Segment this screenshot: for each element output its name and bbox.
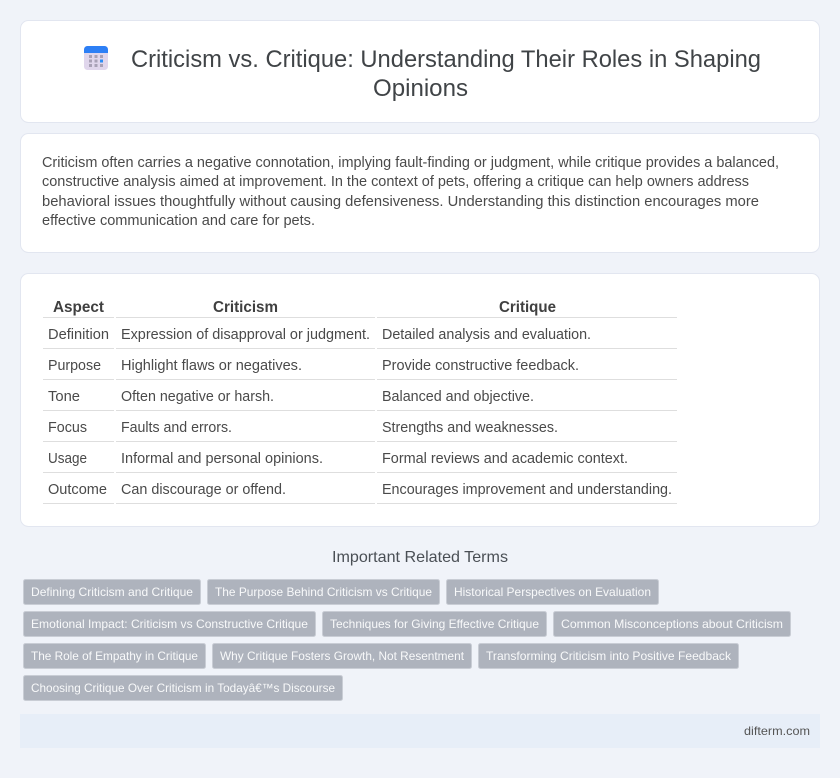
intro paragraph: effective communication and care for pets. [42, 213, 315, 229]
panel: comparison table card [20, 274, 820, 526]
table: header row: Aspect [53, 299, 105, 316]
intro paragraph: Criticism often carries a negative connotation, implying fault-finding or judgment, while critique provides a balanced, [42, 155, 779, 171]
table row: focus: Focus [48, 420, 87, 436]
tag [24, 612, 316, 636]
tag [212, 644, 472, 668]
table row: usage [43, 451, 677, 472]
table row: tone: Often negative or harsh. [121, 389, 274, 405]
footer bar [20, 714, 820, 748]
tag [478, 644, 738, 668]
tag: Transforming Criticism into Positive Feedback [486, 649, 732, 663]
table row: outcome: Can discourage or offend. [121, 482, 286, 498]
table row: purpose: Purpose [48, 358, 101, 374]
table row: focus [43, 420, 677, 442]
heading: related terms: Important Related Terms [332, 549, 508, 566]
tag [554, 612, 790, 636]
title: Opinions [373, 75, 468, 102]
table row: definition: Detailed analysis and evaluation. [382, 327, 591, 343]
title: Criticism vs. Critique: Understanding Their Roles in Shaping [131, 46, 761, 73]
tag [322, 612, 546, 636]
table row: purpose: Provide constructive feedback. [382, 358, 579, 374]
tag: Historical Perspectives on Evaluation [454, 585, 651, 599]
table row: usage: Usage [48, 451, 87, 467]
panel: intro text card [20, 134, 820, 252]
related term tags [24, 580, 790, 700]
tag [446, 580, 658, 604]
intro paragraph [42, 155, 779, 229]
tag [24, 676, 342, 700]
table row: outcome: Outcome [48, 482, 107, 498]
tag [24, 644, 206, 668]
table row: usage: Formal reviews and academic context. [382, 451, 628, 467]
table: header row: Criticism [213, 299, 278, 316]
tag: Common Misconceptions about Criticism [561, 617, 783, 631]
intro paragraph: constructive analysis aimed at improvement. In the context of pets, offering a critique can help owners address [42, 174, 749, 190]
table row: purpose: Highlight flaws or negatives. [121, 358, 302, 374]
intro paragraph: behavioral issues thoughtfully without causing defensiveness. Understanding this distinction encourages more [42, 194, 759, 210]
tag [208, 580, 440, 604]
tag: The Role of Empathy in Critique [31, 649, 198, 663]
table: header row: Critique [499, 299, 556, 316]
table row: purpose [43, 358, 677, 380]
table row: focus: Strengths and weaknesses. [382, 420, 558, 436]
tag: Emotional Impact: Criticism vs Constructive Critique [31, 617, 308, 631]
panel: header card [20, 20, 820, 122]
tag: Choosing Critique Over Criticism in Todayâ€™s Discourse [31, 681, 335, 695]
table row: outcome: Encourages improvement and understanding. [382, 482, 672, 498]
tag: Techniques for Giving Effective Critique [330, 617, 539, 631]
tag: The Purpose Behind Criticism vs Critique [215, 585, 432, 599]
table: header row [43, 299, 677, 318]
table row: definition [43, 327, 677, 348]
table row: tone [43, 389, 677, 410]
tag: Why Critique Fosters Growth, Not Resentment [220, 649, 465, 663]
tag: Defining Criticism and Critique [31, 585, 193, 599]
table row: tone: Balanced and objective. [382, 389, 534, 405]
table row: definition: Expression of disapproval or judgment. [121, 327, 370, 343]
table row: outcome [43, 482, 677, 504]
footer bar: difterm.com [744, 724, 810, 738]
icon: calendar [84, 46, 108, 70]
table row: focus: Faults and errors. [121, 420, 232, 436]
table row: usage: Informal and personal opinions. [121, 451, 323, 467]
title [131, 46, 761, 102]
table row: definition: Definition [48, 327, 109, 343]
table row: tone: Tone [48, 389, 80, 405]
tag [24, 580, 200, 604]
